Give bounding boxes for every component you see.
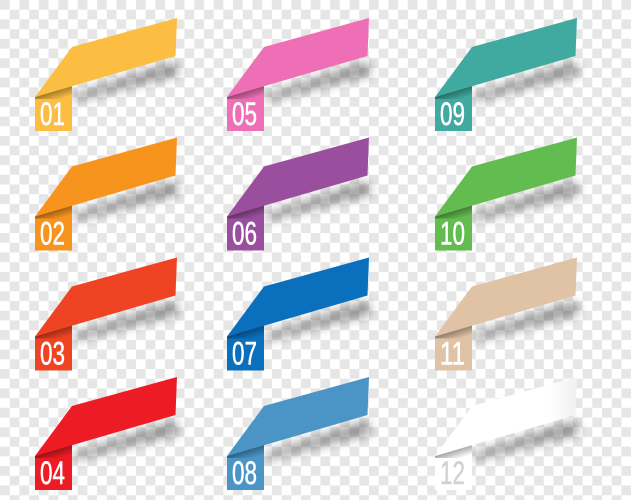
ribbon 09: 09 [440, 96, 465, 132]
ribbon 08: 08 [232, 455, 257, 491]
ribbon 06 [227, 138, 370, 252]
ribbon 07: 07 [232, 336, 257, 372]
ribbon 11 [435, 258, 578, 372]
ribbon 01: 01 [40, 96, 65, 132]
ribbon 03 [35, 258, 178, 372]
ribbon 09 [435, 18, 578, 132]
ribbon 02: 02 [40, 216, 65, 252]
ribbon 12: 12 [440, 455, 465, 491]
ribbon 12 [435, 377, 578, 491]
ribbon 05 [227, 18, 370, 132]
ribbon 04 [35, 377, 178, 491]
ribbon 01 [35, 18, 178, 132]
ribbon 11: 11 [440, 336, 465, 372]
ribbon 06: 06 [232, 216, 257, 252]
ribbon 10: 10 [440, 216, 465, 252]
ribbon 05: 05 [232, 96, 257, 132]
ribbon 07 [227, 258, 370, 372]
ribbon 10 [435, 138, 578, 252]
ribbon 02 [35, 138, 178, 252]
ribbon 08 [227, 377, 370, 491]
ribbon 03: 03 [40, 336, 65, 372]
ribbon 04: 04 [40, 455, 65, 491]
